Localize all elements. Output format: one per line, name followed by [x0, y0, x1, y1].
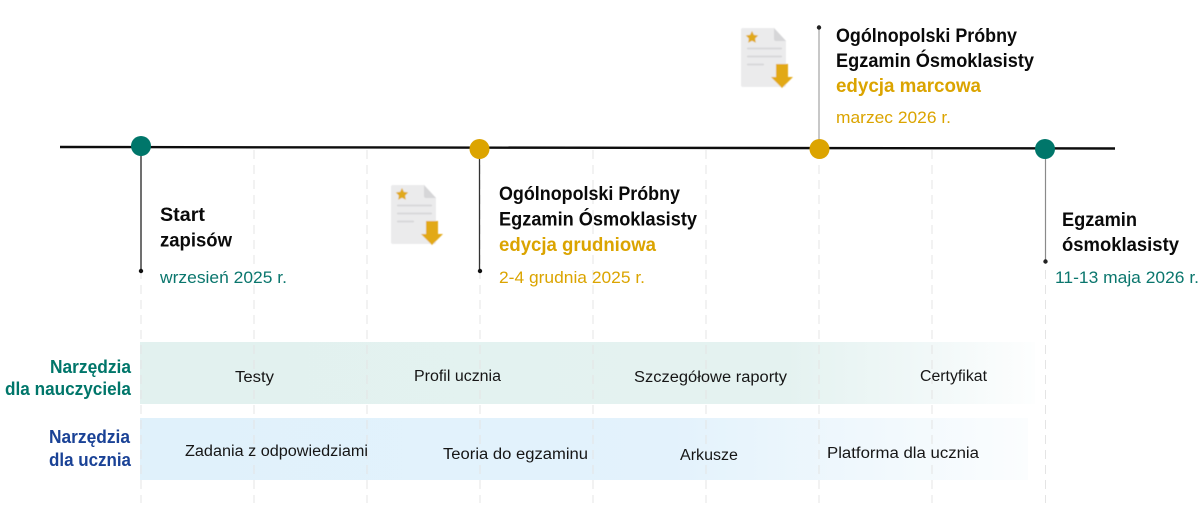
- milestone: edycja grudniowa: 2-4 grudnia 2025 r.: [499, 268, 645, 287]
- band: tools for teachers: [140, 342, 1035, 404]
- teacher tool items: Certyfikat: [920, 368, 988, 385]
- milestone: edycja marcowa: marzec 2026 r.: [836, 108, 951, 127]
- milestone: egzamin ósmoklasisty: [1035, 139, 1199, 287]
- milestone: edycja grudniowa: [470, 139, 697, 287]
- milestone: start zapisów: wrzesień 2025 r.: [159, 268, 287, 287]
- milestone: start zapisów: Start: [160, 205, 206, 226]
- teacher tool items: Szczegółowe raporty: [634, 369, 787, 386]
- student tool items: Platforma dla ucznia: [827, 445, 979, 462]
- label: tools for teachers: dla nauczyciela: [5, 379, 132, 399]
- milestone: edycja marcowa: edycja marcowa: [836, 76, 981, 97]
- label: tools for students: dla ucznia: [49, 450, 132, 470]
- student tool items: Teoria do egzaminu: [443, 446, 588, 463]
- milestone: start zapisów: zapisów: [160, 230, 232, 252]
- milestone: egzamin ósmoklasisty: 11-13 maja 2026 r.: [1055, 268, 1199, 287]
- teacher tool items: Profil ucznia: [414, 368, 501, 385]
- milestone: egzamin ósmoklasisty: ósmoklasisty: [1062, 235, 1179, 256]
- timeline axis: [60, 147, 1115, 148]
- student tool items: Zadania z odpowiedziami: [185, 443, 368, 460]
- student tool items: [185, 443, 979, 464]
- milestone: edycja marcowa: Ogólnopolski Próbny: [836, 26, 1017, 47]
- teacher tool items: Testy: [235, 369, 274, 386]
- band: tools for students: [140, 418, 1028, 480]
- icon: document with download arrow (December): [391, 185, 443, 245]
- milestone: edycja grudniowa: Egzamin Ósmoklasisty: [499, 208, 697, 230]
- label: tools for teachers: [5, 357, 132, 399]
- milestone: edycja grudniowa: Ogólnopolski Próbny: [499, 184, 680, 205]
- teacher tool items: [235, 368, 988, 386]
- milestone: edycja marcowa: Egzamin Ósmoklasisty: [836, 50, 1034, 72]
- milestone: start zapisów: [131, 136, 287, 287]
- student tool items: Arkusze: [680, 447, 738, 464]
- label: tools for students: [49, 427, 132, 470]
- milestone: edycja marcowa: [810, 25, 1034, 159]
- icon: document with download arrow (March): [741, 28, 793, 88]
- label: tools for students: Narzędzia: [49, 427, 131, 447]
- milestone: edycja grudniowa: edycja grudniowa: [499, 235, 656, 256]
- milestone: egzamin ósmoklasisty: Egzamin: [1062, 210, 1137, 231]
- label: tools for teachers: Narzędzia: [50, 357, 132, 377]
